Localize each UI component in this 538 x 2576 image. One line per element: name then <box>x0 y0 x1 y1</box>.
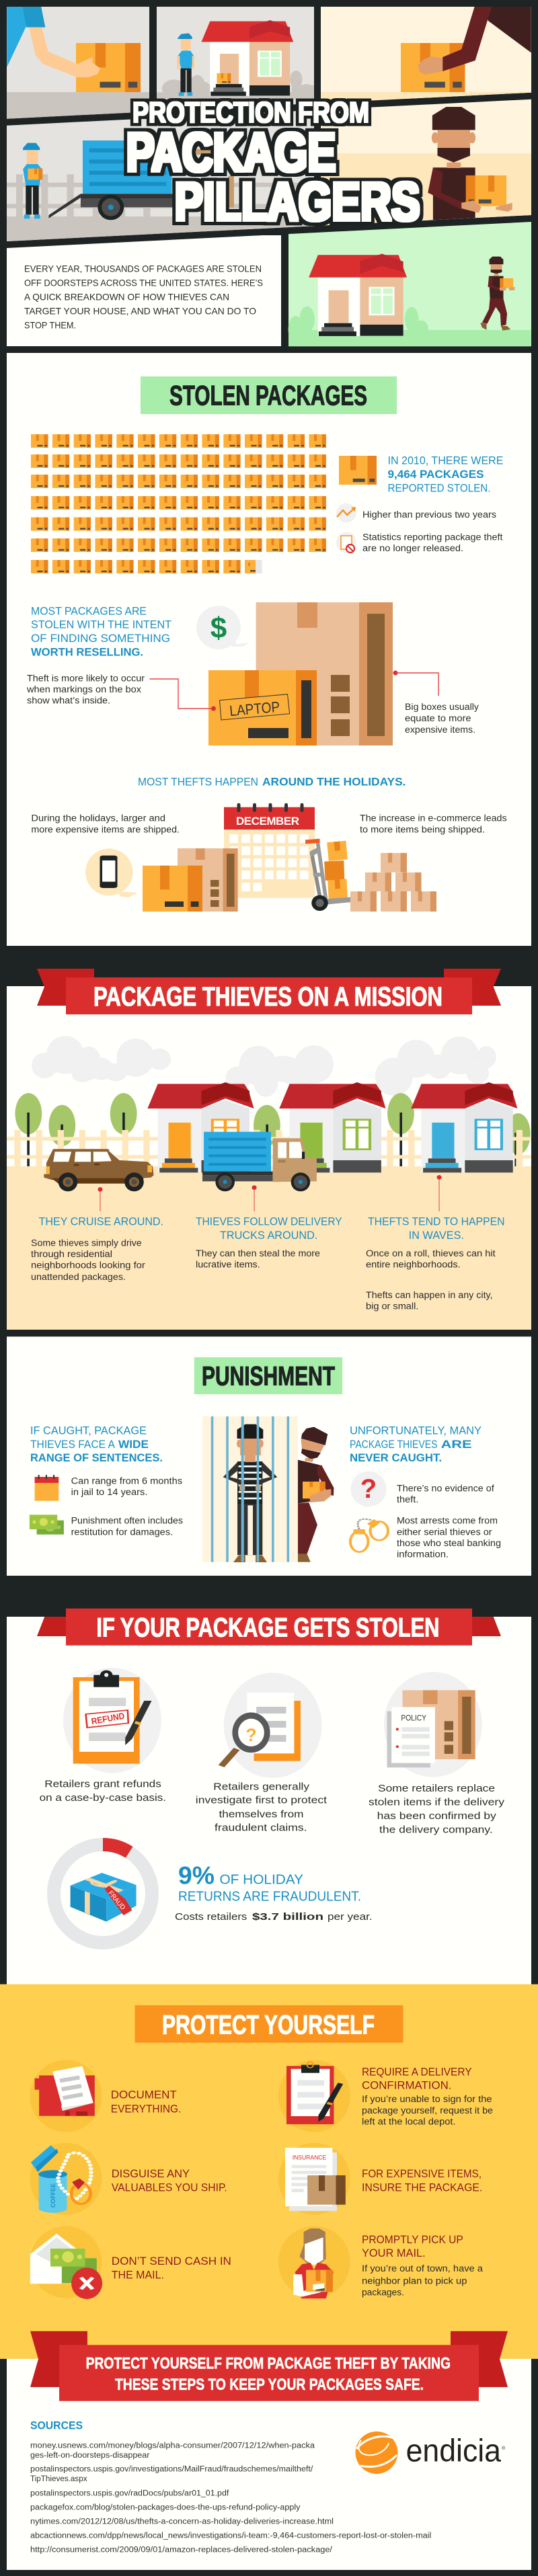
text: insure the package <box>362 2167 482 2193</box>
heading: worth reselling: STOLEN WITH THE INTENT <box>31 618 171 631</box>
text: refunds case by case: Retailers grant refunds <box>44 1778 161 1789</box>
icon: magnifier over document: ? <box>245 1725 257 1745</box>
illustration: delivery truck and courier <box>7 140 315 243</box>
text: don't send cash: THE MAIL. <box>112 2268 164 2281</box>
text: don't send cash <box>112 2255 231 2281</box>
text: thefts in waves: entire neighborhoods. <box>366 1260 461 1270</box>
text: investigate first: themselves from <box>219 1808 304 1820</box>
text: promptly pick up: PROMPTLY PICK UP <box>362 2233 463 2246</box>
panel: top row package and house <box>7 7 531 119</box>
illustration: house and thief walking away <box>289 253 531 346</box>
text: thieves follow delivery trucks: lucrative items. <box>196 1260 260 1270</box>
text: wide range of sentences: RANGE OF SENTENCES. <box>30 1451 163 1464</box>
stat: 9,464 packages: 9,464 PACKAGES <box>387 468 484 481</box>
text: six months to 14 years: in jail to 14 years. <box>71 1487 147 1497</box>
illustration: big and small boxes with laptop label <box>208 602 393 746</box>
text: costs retailers <box>175 1911 373 1923</box>
illustration: stacked shipped boxes <box>143 848 238 912</box>
clouds <box>32 1036 496 1097</box>
text: delivery confirmation <box>362 2065 493 2127</box>
text: no evidence: theft. <box>397 1494 418 1504</box>
text: insure the package: FOR EXPENSIVE ITEMS, <box>362 2167 482 2180</box>
text: promptly pick up: YOUR MAIL. <box>362 2247 426 2259</box>
text: thefts in waves <box>366 1215 504 1312</box>
icon: fraud gift box: FRAUD <box>106 1890 126 1911</box>
illustration: december calendar: DECEMBER <box>236 815 299 828</box>
text: document everything: DOCUMENT <box>111 2089 177 2101</box>
callout: markings on the box: when markings on the box <box>26 684 141 694</box>
illustration: big and small boxes with laptop label: LAPTOP <box>229 698 280 719</box>
divider <box>156 92 157 98</box>
callout: big boxes: equate to more <box>405 713 471 723</box>
icon: woman picking up package <box>278 2226 350 2298</box>
sources list: abcactionnews.com/dpp/news/local_news/investigations/i-team:-9,464-customers-report-lost-or-stolen-mail <box>30 2532 431 2540</box>
illustration: phone in speech bubble <box>85 848 137 897</box>
heading: worth reselling: OF FINDING SOMETHING <box>31 632 170 645</box>
text: disguise valuables: VALUABLES YOU SHIP. <box>112 2181 227 2193</box>
ribbon heading: if your package gets stolen <box>37 1609 501 1646</box>
icon: policy and box: POLICY <box>401 1713 426 1722</box>
heading: protect yourself <box>134 2005 404 2043</box>
sources list: nytimes.com/2012/12/08/us/thefts-a-concern-as-holiday-deliveries-increase.html <box>30 2518 334 2526</box>
intro text <box>24 263 263 330</box>
title: PACKAGE <box>126 122 336 183</box>
note: statistics no longer released: are no longer released. <box>362 543 463 553</box>
text: replace stolen items: the delivery company. <box>379 1824 493 1836</box>
stat: 9 percent of returns: RETURNS ARE FRAUDULENT. <box>178 1890 361 1904</box>
heading: worth reselling: WORTH RESELLING. <box>31 646 143 659</box>
title: PILLAGERS <box>175 172 420 233</box>
text: never caught <box>350 1424 482 1464</box>
text: larger items shipped <box>31 813 180 834</box>
text: insure the package: INSURE THE PACKAGE. <box>362 2181 482 2193</box>
icon: money <box>30 1515 64 1535</box>
text: replace stolen items <box>369 1783 505 1836</box>
icon: envelope with crossed-out cash <box>30 2226 102 2299</box>
panel: package thieves on a mission <box>7 969 531 1330</box>
callout: markings on the box: show what’s inside. <box>27 696 110 706</box>
text: promptly pick up: If you’re out of town, have a <box>362 2263 483 2273</box>
text: e-commerce increase <box>360 813 507 834</box>
icon: calendar <box>35 1475 59 1501</box>
ribbon: closing message: THESE STEPS TO KEEP YOUR PACKAGES SAFE. <box>115 2376 424 2394</box>
text: thefts in waves: Thefts can happen in any city, <box>366 1290 493 1300</box>
sources list: TipThieves.aspx <box>30 2475 87 2483</box>
text: disguise valuables <box>112 2167 227 2193</box>
callout: markings on the box <box>26 673 216 711</box>
intro text: OFF DOORSTEPS ACROSS THE UNITED STATES. HERE’S <box>24 277 263 288</box>
icon: document folder <box>30 2060 102 2132</box>
stat: 9 percent of returns: 9% <box>178 1862 215 1890</box>
text: wide range of sentences: WIDE <box>118 1438 149 1451</box>
text: wide range of sentences <box>30 1424 163 1464</box>
text: thefts in waves: Once on a roll, thieves can hit <box>366 1248 496 1258</box>
text: don't send cash: DON’T SEND CASH IN <box>112 2255 231 2267</box>
prisoner <box>223 1424 277 1562</box>
text: they cruise around: Some thieves simply drive <box>31 1238 142 1248</box>
icon: delivery confirmation clipboard <box>278 2060 350 2132</box>
text: wide range of sentences: THIEVES FACE A <box>30 1438 116 1451</box>
text: restitution: Punishment often includes <box>71 1516 183 1526</box>
illustration: courier and house <box>157 20 314 99</box>
jail bars <box>211 1416 289 1562</box>
text: six months to 14 years: Can range from 6 months <box>71 1476 182 1486</box>
panel: stolen packages <box>7 353 531 946</box>
text: they cruise around <box>31 1215 163 1282</box>
houses <box>147 1082 517 1172</box>
illustration: december calendar <box>224 803 315 898</box>
icon: handcuffs <box>350 1519 388 1552</box>
text: refunds case by case: on a case-by-case basis. <box>40 1792 166 1804</box>
panel: punishment <box>7 1336 531 1576</box>
text: six months to 14 years <box>71 1476 182 1497</box>
panel: footer <box>7 2331 531 2570</box>
text: thieves follow delivery trucks <box>196 1215 342 1270</box>
text: most arrests: Most arrests come from <box>397 1516 498 1526</box>
text: most arrests <box>397 1516 501 1560</box>
logo: endicia: endicia <box>406 2433 502 2468</box>
donut chart: 9 percent <box>54 1838 152 1943</box>
text: costs retailers: $3.7 billion <box>252 1911 323 1923</box>
text: replace stolen items: stolen items if the delivery <box>369 1797 505 1808</box>
note: higher than previous years: Higher than previous two years <box>362 510 496 520</box>
text: thefts in waves: IN WAVES. <box>409 1229 464 1242</box>
trees <box>15 1093 531 1166</box>
heading: around the holidays: AROUND THE HOLIDAYS. <box>262 775 406 788</box>
text: they cruise around: THEY CRUISE AROUND. <box>39 1215 163 1228</box>
text: wide range of sentences: IF CAUGHT, PACKAGE <box>30 1424 147 1437</box>
icon: insurance document with box: INSURANCE <box>293 2154 326 2161</box>
text: e-commerce increase: The increase in e-commerce leads <box>360 813 507 823</box>
text: e-commerce increase: to more items being shipped. <box>360 824 485 834</box>
icon: clipboard with prohibited sign <box>336 532 356 553</box>
pictogram of stolen package boxes <box>31 434 326 573</box>
illustration: prisoner behind bars and escaping thief <box>202 1416 334 1562</box>
text: most arrests: information. <box>397 1549 449 1560</box>
text: disguise valuables: DISGUISE ANY <box>112 2167 190 2180</box>
text: delivery confirmation: left at the local depot. <box>362 2117 456 2127</box>
heading: sources: SOURCES <box>30 2419 83 2431</box>
text: no evidence <box>397 1483 494 1504</box>
title: PROTECTION FROM <box>132 96 369 129</box>
icon: magnifier over document <box>221 1673 322 1778</box>
callout: big boxes: expensive items. <box>405 725 475 735</box>
text: delivery confirmation: package yourself, request it be <box>362 2105 493 2116</box>
callout: big boxes <box>393 671 479 735</box>
sources list: postalinspectors.uspis.gov/radDocs/pubs/ar01_01.pdf <box>30 2489 229 2497</box>
panel: middle row delivery and thief <box>7 94 531 249</box>
note: statistics no longer released <box>362 532 503 553</box>
text: costs retailers: per year. <box>328 1911 373 1923</box>
sources list: http://consumerist.com/2009/09/01/amazon-replaces-delivered-stolen-package/ <box>30 2546 333 2554</box>
heading: worth reselling <box>31 604 171 659</box>
text: larger items shipped: more expensive items are shipped. <box>31 824 180 834</box>
icon: fraud gift box <box>71 1873 137 1922</box>
logo: endicia <box>355 2431 506 2474</box>
intro text: TARGET YOUR HOUSE, AND WHAT YOU CAN DO TO <box>24 305 256 316</box>
illustration: courier arm leaving package <box>7 7 141 92</box>
text: refunds case by case <box>40 1778 166 1804</box>
text: costs retailers: Costs retailers <box>175 1911 247 1923</box>
text: larger items shipped: During the holidays, larger and <box>31 813 165 823</box>
illustration: thief holding package <box>428 107 512 224</box>
text: no evidence: There’s no evidence of <box>397 1483 494 1493</box>
icon: refund clipboard: REFUND <box>90 1711 125 1726</box>
text: they cruise around: through residential <box>31 1249 112 1259</box>
stat: 9 percent of returns: OF HOLIDAY <box>219 1873 303 1888</box>
intro text: STOP THEM. <box>24 319 76 330</box>
text: promptly pick up: neighbor plan to pick up <box>362 2276 467 2286</box>
panel: protect yourself <box>0 1984 538 2359</box>
thief <box>298 1427 334 1562</box>
text: delivery confirmation: CONFIRMATION. <box>362 2079 451 2092</box>
icon: insurance document with box <box>278 2143 350 2215</box>
pins <box>98 1175 442 1211</box>
icon: delivery truck <box>201 1132 317 1191</box>
divider <box>314 226 315 227</box>
icon: rising trend <box>336 503 356 523</box>
icon: coffee can with jewelry <box>30 2143 102 2215</box>
text: they cruise around: neighborhoods looking for <box>31 1260 145 1271</box>
illustration: pyramid of boxes <box>350 853 436 912</box>
text: investigate first: fraudulent claims. <box>215 1822 307 1834</box>
text: document everything: EVERYTHING. <box>111 2102 181 2115</box>
sources list: money.usnews.com/money/blogs/alpha-consumer/2007/12/12/when-packa <box>30 2442 315 2450</box>
ribbon: closing message <box>30 2331 508 2401</box>
heading: punishment: PUNISHMENT <box>202 1362 335 1392</box>
text: document everything <box>111 2089 181 2115</box>
illustration: thief arm taking package <box>401 7 531 92</box>
ribbon heading: package thieves on a mission: PACKAGE THIEVES ON A MISSION <box>93 982 443 1012</box>
heading: stolen packages <box>141 376 397 414</box>
callout: markings on the box: Theft is more likely to occur <box>27 673 145 683</box>
text: promptly pick up <box>362 2233 483 2297</box>
heading: stolen packages: STOLEN PACKAGES <box>169 379 367 411</box>
icon: dollar speech bubble: $ <box>210 612 227 645</box>
text: investigate first: Retailers generally <box>213 1781 310 1792</box>
icon: question mark: ? <box>360 1474 377 1504</box>
note: statistics no longer released: Statistics reporting package theft <box>362 532 503 542</box>
intro text: EVERY YEAR, THOUSANDS OF PACKAGES ARE STOLEN <box>24 263 262 274</box>
heading: punishment <box>194 1357 342 1394</box>
sources list: ges-left-on-doorsteps-disappear <box>30 2452 150 2460</box>
heading: worth reselling: MOST PACKAGES ARE <box>31 604 147 617</box>
intro text: A QUICK BREAKDOWN OF HOW THIEVES CAN <box>24 291 229 302</box>
text: never caught: ARE <box>441 1438 472 1451</box>
panel: if your package gets stolen <box>7 1609 531 1984</box>
text: they cruise around: unattended packages. <box>31 1272 126 1282</box>
stat: 9,464 packages: IN 2010, THERE WERE <box>387 454 503 467</box>
ribbon heading: package thieves on a mission <box>37 969 501 1014</box>
text: replace stolen items: Some retailers replace <box>378 1783 495 1794</box>
icon: brown car <box>44 1149 154 1191</box>
title <box>126 96 420 233</box>
sources list <box>30 2442 431 2554</box>
text: thefts in waves: big or small. <box>366 1301 418 1312</box>
text: delivery confirmation: REQUIRE A DELIVERY <box>362 2065 472 2078</box>
text: never caught: NEVER CAUGHT. <box>350 1451 442 1464</box>
icon: refund clipboard <box>63 1668 161 1773</box>
text: restitution <box>71 1516 183 1537</box>
heading: around the holidays <box>138 775 406 788</box>
stat: 9,464 packages: REPORTED STOLEN. <box>387 482 491 495</box>
heading: protect yourself: PROTECT YOURSELF <box>162 2010 375 2040</box>
text: promptly pick up: packages. <box>362 2287 404 2297</box>
stat: 9 percent of returns <box>178 1862 361 1904</box>
text: delivery confirmation: If you’re unable to sign for the <box>362 2094 492 2104</box>
ribbon heading: if your package gets stolen: IF YOUR PACKAGE GETS STOLEN <box>96 1613 439 1642</box>
icon: policy and box <box>384 1672 482 1777</box>
text: thieves follow delivery trucks: They can then steal the more <box>196 1248 320 1258</box>
text: never caught: UNFORTUNATELY, MANY <box>350 1424 482 1437</box>
icon: question mark <box>351 1472 386 1506</box>
header comic panels <box>7 0 531 346</box>
illustration: hand truck with boxes <box>305 839 354 911</box>
sources list: packagefox.com/blog/stolen-packages-does-the-ups-refund-policy-apply <box>30 2503 301 2511</box>
text: thieves follow delivery trucks: TRUCKS AROUND. <box>220 1229 317 1242</box>
logo: endicia: ® <box>502 2446 506 2451</box>
text: replace stolen items: has been confirmed by <box>377 1810 496 1822</box>
heading: around the holidays: MOST THEFTS HAPPEN <box>138 775 258 788</box>
text: thieves follow delivery trucks: THIEVES FOLLOW DELIVERY <box>196 1215 342 1228</box>
text: most arrests: either serial thieves or <box>397 1527 492 1537</box>
stat: 9,464 packages <box>339 454 503 495</box>
text: investigate first <box>196 1781 328 1834</box>
fence <box>7 1130 531 1166</box>
sources list: postalinspectors.uspis.gov/investigations/MailFraud/fraudschemes/mailtheft/ <box>30 2466 313 2474</box>
text: investigate first: investigate first to protect <box>196 1795 328 1806</box>
icon: coffee can with jewelry: COFFEE <box>50 2183 57 2208</box>
panel: bottom row with intro and house <box>7 215 531 346</box>
text: never caught: PACKAGE THIEVES <box>350 1438 437 1451</box>
text: thefts in waves: THEFTS TEND TO HAPPEN <box>368 1215 504 1228</box>
callout: big boxes: Big boxes usually <box>405 702 479 712</box>
text: restitution: restitution for damages. <box>71 1527 173 1537</box>
ribbon: closing message: PROTECT YOURSELF FROM PACKAGE THEFT BY TAKING <box>86 2354 451 2372</box>
street scene <box>7 1036 531 1211</box>
text: most arrests: those who steal banking <box>397 1538 501 1548</box>
icon: dollar speech bubble <box>196 606 249 649</box>
